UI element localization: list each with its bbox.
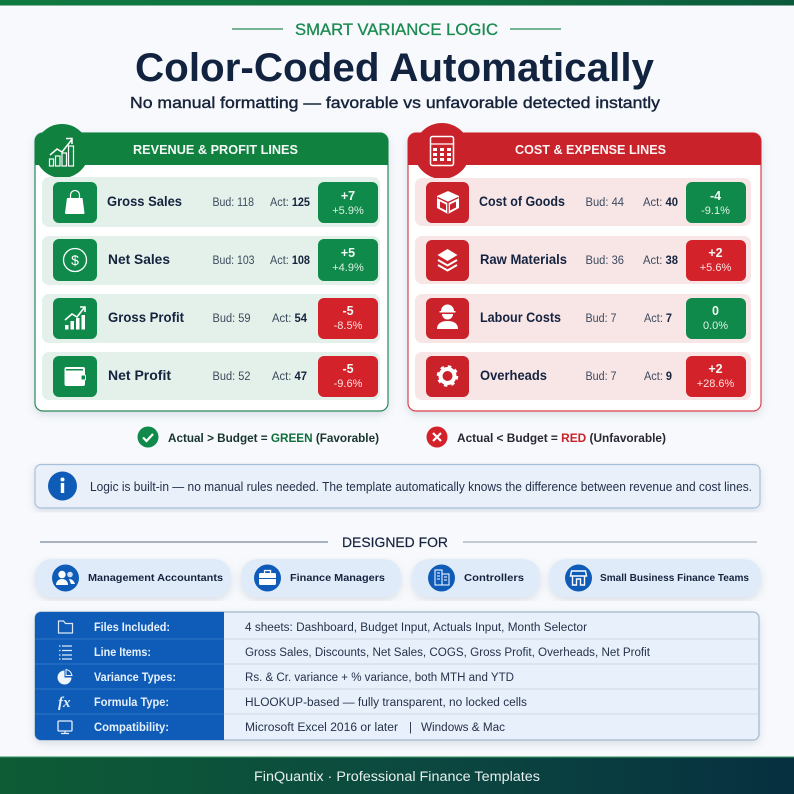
row: labour costs: 0.0% [703,320,728,332]
row: net sales [42,236,380,285]
row: gross sales: Act: 125 [270,197,311,209]
row: labour costs: Labour Costs [480,310,561,325]
row: net profit: Bud: 52 [212,371,250,383]
panel: cost and expense lines [408,123,761,411]
row: net profit: -5 [342,362,354,376]
row: cost of goods: Act: 40 [643,197,678,209]
row: variance types [58,670,514,685]
row: net profit: Act: 47 [272,371,307,383]
row: compatibility: Compatibility: [94,722,169,734]
section heading: designed for: DESIGNED FOR [342,534,448,550]
row: labour costs [415,294,751,343]
row: files included: Files Included: [94,622,170,634]
eyebrow heading: SMART VARIANCE LOGIC [295,21,498,39]
row: gross profit: Gross Profit [108,310,184,325]
footer [0,756,794,794]
row: overheads: Act: 9 [644,371,672,383]
pill: controllers [412,559,540,597]
row: gross profit [42,294,380,343]
row: raw materials: +5.6% [700,262,731,274]
panel icon: growth chart [35,124,89,178]
row: formula type: Formula Type: [94,697,169,709]
row: cost of goods: -9.1% [701,205,730,217]
row: compatibility: Windows & Mac [421,722,505,734]
legend: unfavorable rule [426,426,666,448]
row: labour costs: 0 [712,304,719,318]
row: net profit [42,352,380,400]
row: gross sales: Gross Sales [107,194,182,209]
row: variance types: Rs. & Cr. variance + % variance, both MTH and YTD [245,672,514,684]
pill: small business finance teams [549,559,761,597]
top bar [0,0,794,6]
row: compatibility: Microsoft Excel 2016 or later [245,722,398,734]
row: cost of goods [415,178,751,226]
row: gross sales [42,177,380,227]
row: gross profit: -5 [342,304,354,318]
row: raw materials: +2 [708,246,723,260]
row: raw materials: Bud: 36 [586,255,624,267]
row: compatibility [58,721,505,734]
row: line items [59,646,651,659]
row: formula type [58,695,527,711]
row: overheads: Bud: 7 [586,371,616,383]
row: net profit: Net Profit [108,368,172,383]
row: gross profit: Bud: 59 [212,313,250,325]
row: raw materials: Act: 38 [643,255,679,267]
row: gross sales: Bud: 118 [212,197,254,209]
row: gross sales: +7 [341,189,355,203]
spec table [35,612,759,740]
callout: built-in logic [35,464,760,508]
row: labour costs: Act: 7 [644,313,672,325]
pill: management accountants [35,559,231,597]
row: net sales: Act: 108 [270,255,311,267]
row: files included [58,621,587,634]
row: overheads: +28.6% [697,378,735,390]
row: cost of goods: Bud: 44 [586,197,625,209]
subtitle: No manual formatting — favorable vs unfavorable detected instantly [130,95,660,112]
row: overheads: Overheads [480,368,547,383]
pill: finance managers: Finance Managers [290,572,385,584]
row: raw materials: Raw Materials [480,252,567,267]
footer: FinQuantix · Professional Finance Templates [254,769,540,784]
row: net sales: +4.9% [332,262,364,274]
row: line items: Line Items: [94,647,151,659]
row: compatibility: | [409,722,412,734]
row: cost of goods: -4 [710,189,721,203]
row: overheads: +2 [708,362,723,376]
row: gross profit: -8.5% [334,320,363,332]
row: cost of goods: Cost of Goods [479,194,565,209]
row: net sales: Bud: 103 [212,255,254,267]
row: variance types: Variance Types: [94,672,176,684]
row: formula type: HLOOKUP-based — fully transparent, no locked cells [245,697,527,709]
callout: built-in logic: Logic is built-in — no manual rules needed. The template automatically knows the difference between revenue and cost lines. [90,480,752,494]
pill: controllers: Controllers [464,572,524,584]
row: net sales: $ [71,252,79,268]
pill: small business finance teams: Small Business Finance Teams [600,572,749,584]
pill: finance managers [241,559,401,597]
legend: favorable rule [138,426,379,448]
row: net sales: Net Sales [108,252,170,267]
panel heading: REVENUE & PROFIT LINES [133,142,298,157]
row: files included: 4 sheets: Dashboard, Budget Input, Actuals Input, Month Selector [245,622,587,634]
row: net profit: -9.6% [334,378,363,390]
panel icon: calculator [414,123,470,179]
panel: revenue and profit lines [35,124,388,411]
panel heading: COST & EXPENSE LINES [515,142,666,157]
row: gross profit: Act: 54 [272,313,308,325]
row: net sales: +5 [341,246,355,260]
row: formula type: fx [58,695,71,711]
row: line items: Gross Sales, Discounts, Net Sales, COGS, Gross Profit, Overheads, Net Profit [245,647,651,659]
row: overheads [415,352,751,400]
pill: management accountants: Management Accountants [88,572,223,584]
title: Color-Coded Automatically [135,46,655,90]
legend: unfavorable rule: Actual < Budget = RED (Unfavorable) [457,431,666,445]
row: gross sales: +5.9% [332,205,364,217]
row: raw materials [415,236,751,284]
row: labour costs: Bud: 7 [586,313,616,325]
legend: favorable rule: Actual > Budget = GREEN (Favorable) [168,431,379,445]
